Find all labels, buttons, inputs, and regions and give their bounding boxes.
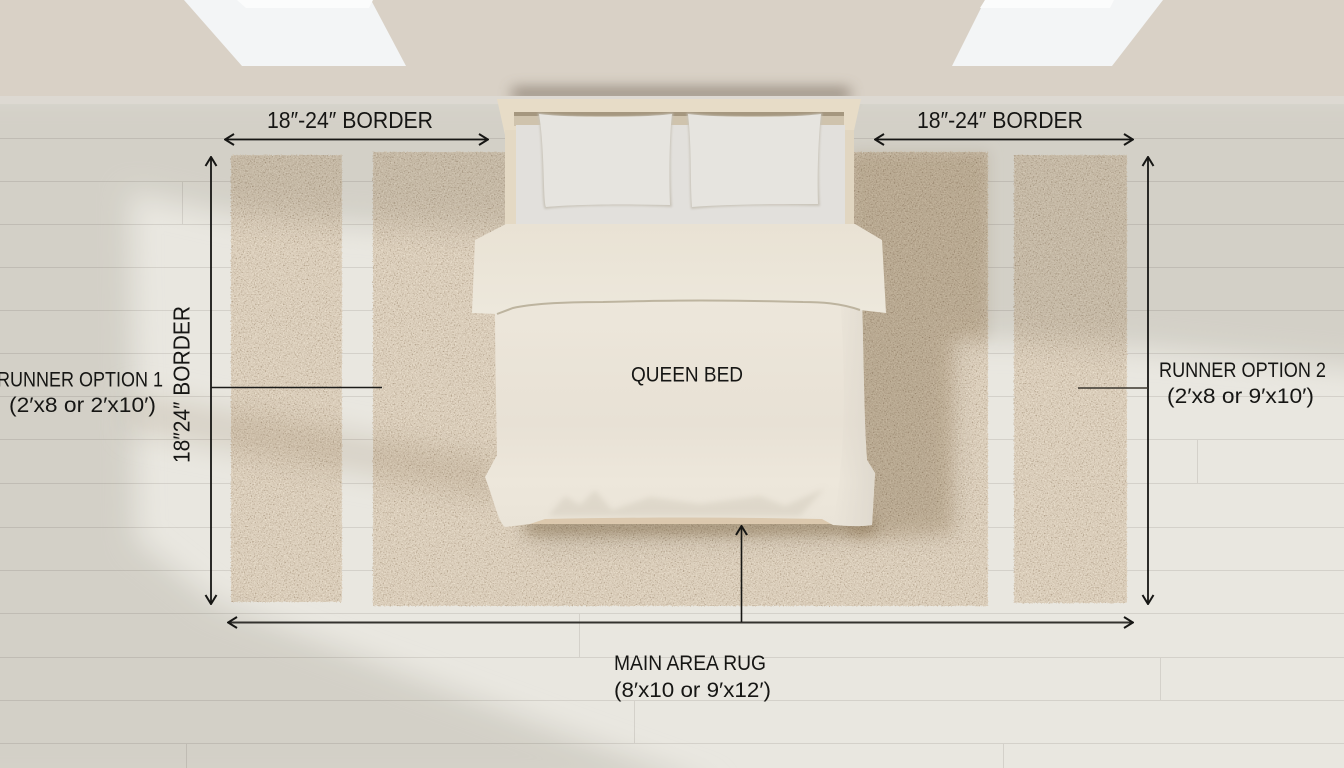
pillow left — [538, 113, 673, 209]
bed contact shadow — [525, 520, 875, 534]
queen bed — [472, 99, 886, 527]
rug: runner option 1 — [231, 155, 342, 602]
label: queen bed: QUEEN BED — [631, 364, 743, 386]
duvet foot folds — [548, 488, 825, 516]
wall trim — [0, 96, 1344, 104]
rug: main area rug — [373, 152, 988, 606]
dimension: main rug width — [228, 526, 1133, 622]
shadow band across left rugs — [130, 392, 500, 498]
sheet — [516, 125, 845, 226]
dimension: top left border: 18″-24″ BORDER — [267, 107, 433, 133]
label: runner option 1 — [0, 368, 163, 417]
label: runner option 2: (2′x8 or 9′x10′) — [1167, 385, 1314, 408]
label: runner option 1: (2′x8 or 2′x10′) — [9, 394, 156, 417]
bed frame foot — [528, 514, 836, 524]
label: runner option 2 — [1159, 359, 1326, 408]
dimension: top right border: 18″-24″ BORDER — [917, 107, 1083, 133]
dimension: left vertical border: 18″24″ BORDER — [168, 306, 194, 463]
leader: runner option 1 — [211, 386, 382, 388]
fold shadow line — [497, 300, 860, 314]
skylight left — [184, 0, 406, 66]
label: main area rug: MAIN AREA RUG — [614, 652, 766, 675]
leader: runner option 2 — [1078, 387, 1148, 389]
rug: runner option 2 — [1014, 155, 1127, 603]
skylight right — [952, 0, 1163, 66]
duvet fold-over — [472, 224, 886, 314]
bed side shadow on rug — [850, 152, 988, 540]
label: main area rug — [614, 652, 771, 702]
duvet side shading — [833, 298, 875, 526]
headboard — [497, 99, 861, 226]
duvet body — [485, 298, 875, 527]
label: main area rug: (8′x10 or 9′x12′) — [614, 679, 771, 702]
dimension: right vertical — [1147, 157, 1149, 604]
ceiling band — [0, 0, 1344, 100]
headboard wall shadow — [512, 88, 850, 100]
label: runner option 1: RUNNER OPTION 1 — [0, 368, 163, 392]
pillow right — [687, 113, 822, 209]
